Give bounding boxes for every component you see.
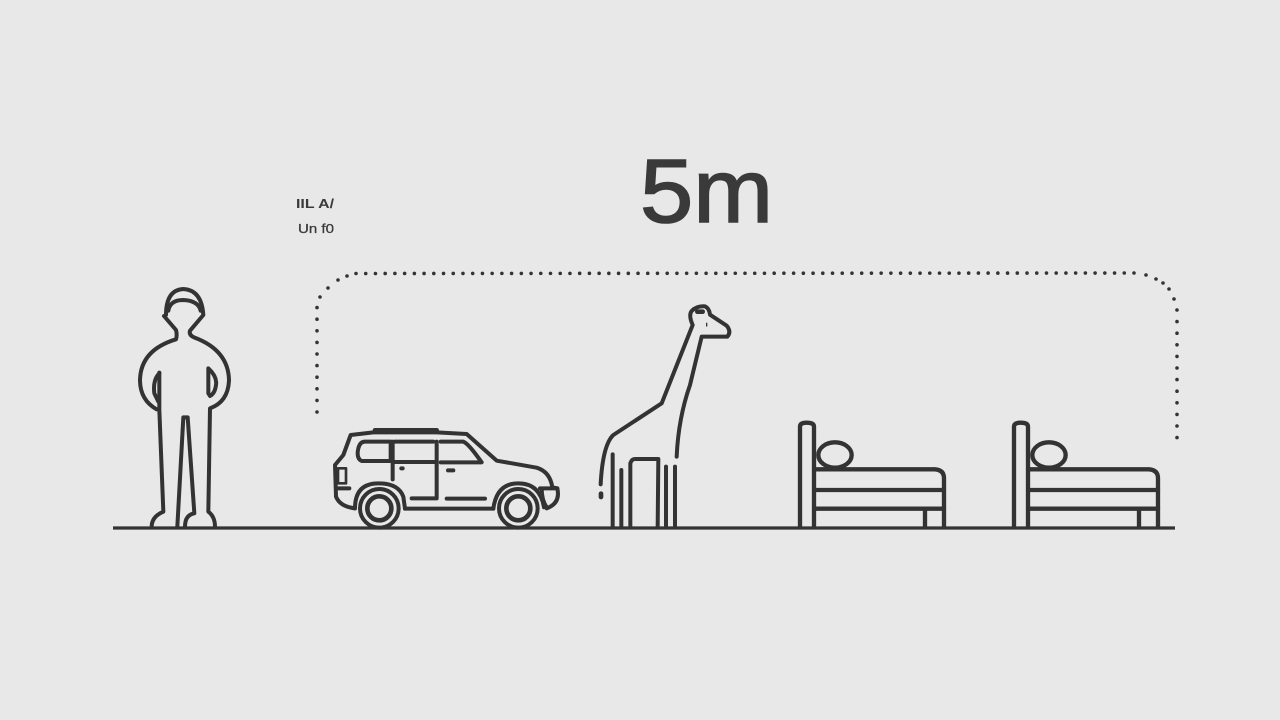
small garbled label: Un f0: [298, 221, 334, 236]
small garbled label: [296, 196, 334, 236]
icon: person: [140, 289, 229, 527]
title: 5m: 5m: [640, 142, 773, 242]
icon: giraffe: [601, 306, 729, 527]
ground line: [113, 526, 1175, 530]
small garbled label: IIL A/: [296, 196, 334, 211]
icon: bed 1: [800, 423, 944, 527]
icon: car: [335, 430, 558, 528]
dotted bracket: 5m span: [317, 273, 1177, 438]
icon: bed 2: [1014, 423, 1158, 527]
